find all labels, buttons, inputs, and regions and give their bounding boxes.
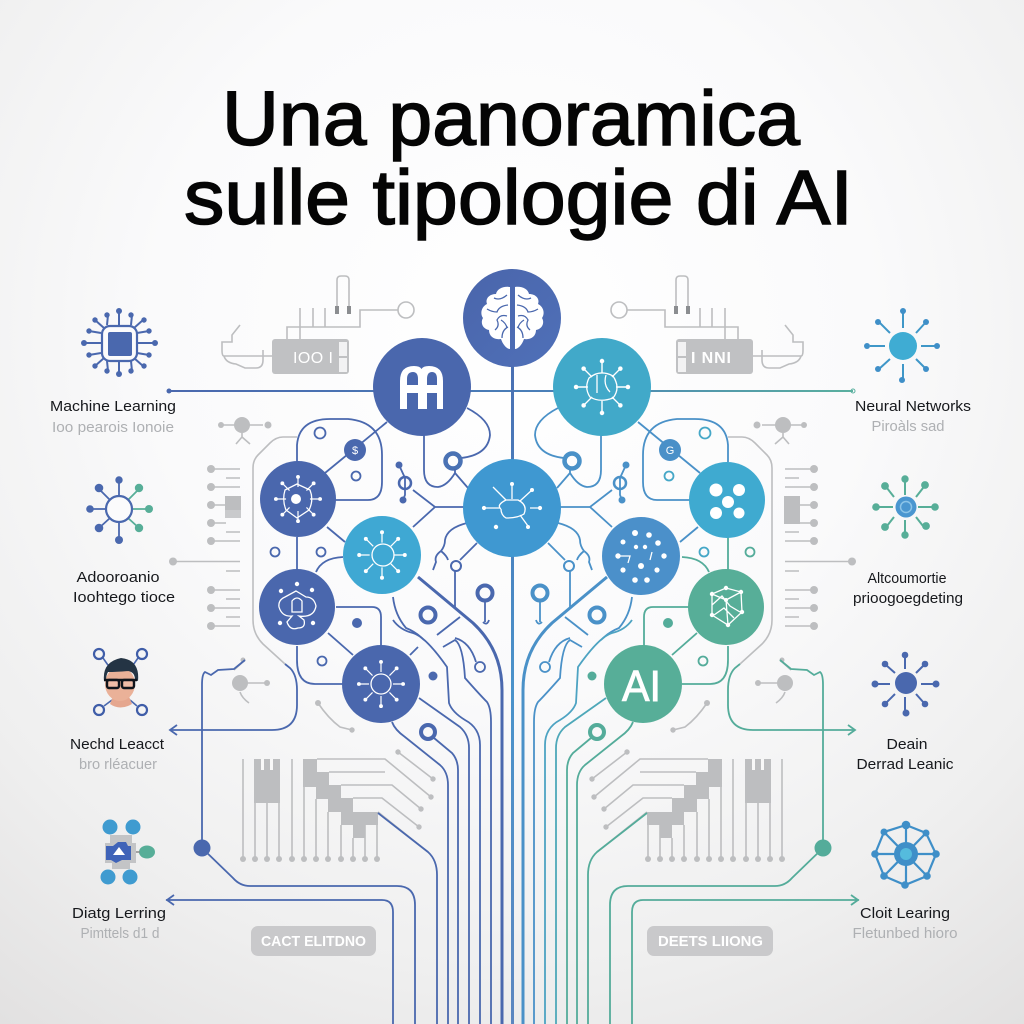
label: Machine Learning: Machine Learning — [50, 398, 176, 415]
icon: person with glasses — [94, 649, 147, 715]
chip label NNI: I NNI — [691, 350, 731, 367]
icon: neural sun — [864, 308, 940, 383]
icon: blue sun — [872, 652, 940, 716]
label: Nechd Leacct: Nechd Leacct — [70, 736, 165, 753]
main horizontal bus — [166, 388, 855, 394]
label: Neural Networks — [855, 398, 971, 435]
node: central network — [463, 459, 561, 557]
label: Adooroanio: Ioohtego tioce — [73, 589, 175, 606]
pill: DEETS LIIONG — [647, 926, 773, 956]
node: left network 4 — [342, 645, 420, 723]
right connection traces — [523, 408, 859, 1024]
central vertical bus — [511, 360, 514, 1024]
label: Deain Derrad Leanic: Deain — [886, 736, 928, 753]
label: Alcoemortie — [853, 570, 963, 607]
node: AI — [604, 645, 682, 723]
label: Adooroanio: Adooroanio — [76, 569, 160, 586]
title — [184, 76, 853, 241]
node: neural network teal — [553, 338, 651, 436]
chip label IOO: IOO I — [293, 350, 333, 367]
left grey circuitry — [169, 276, 436, 862]
label: Alcoemortie: prioogoegdeting — [853, 590, 963, 607]
small badge left: $ — [352, 445, 358, 457]
icon: blue puzzle — [100, 820, 155, 884]
chip label IOO — [272, 339, 349, 374]
icon: chip, Machine Learning — [81, 308, 158, 377]
label: Adooroanio — [73, 569, 175, 606]
label: Nechd Leacct: bro rléacuer — [79, 757, 157, 773]
label: Machine Learning: Ioo pearois Ionoie — [52, 420, 174, 436]
small badge left — [344, 439, 366, 461]
icon: hub network — [871, 821, 940, 889]
node: dot cluster — [602, 517, 680, 595]
label: Cloit Learing: Fletunbed hioro — [852, 926, 958, 942]
label: Diatg Lerring: Pimttels d1 d — [80, 926, 160, 942]
node: five dots — [689, 462, 765, 538]
left connection traces — [166, 408, 502, 1024]
pill: CACT ELITDNO: CACT ELITDNO — [261, 933, 366, 950]
right grey circuitry — [589, 276, 856, 862]
node: cube network — [688, 569, 764, 645]
label: Neural Networks: Neural Networks — [855, 398, 971, 415]
label: Alcoemortie: Altcoumortie — [868, 570, 946, 587]
node: M logo — [373, 338, 471, 436]
title: sulle tipologie di AI — [184, 155, 853, 241]
icon: green sun — [872, 475, 939, 539]
node: AI: AI — [622, 662, 661, 711]
small badge right: G — [666, 445, 674, 457]
node: left network 1 — [260, 461, 336, 537]
label: Deain Derrad Leanic — [856, 736, 954, 773]
pill: DEETS LIIONG: DEETS LIIONG — [658, 933, 763, 950]
label: Machine Learning — [50, 398, 176, 436]
label: Diatg Lerring: Diatg Lerring — [72, 905, 166, 922]
title: Una panoramica — [222, 76, 800, 162]
label: Deain Derrad Leanic: Derrad Leanic — [856, 756, 954, 773]
icon: network left — [86, 476, 153, 544]
small badge right — [659, 439, 681, 461]
pill: CACT ELITDNO — [251, 926, 376, 956]
label: Cloit Learing: Cloit Learing — [860, 905, 950, 922]
node: brain — [463, 269, 561, 367]
label: Diatg Lerring — [72, 905, 166, 942]
node: left network 3 — [259, 569, 335, 645]
label: Nechd Leacct — [70, 736, 165, 773]
node: left network 2 — [343, 516, 421, 594]
label: Cloit Learing — [852, 905, 958, 942]
chip label NNI — [676, 339, 753, 374]
label: Neural Networks: Piroàls sad — [872, 419, 944, 435]
